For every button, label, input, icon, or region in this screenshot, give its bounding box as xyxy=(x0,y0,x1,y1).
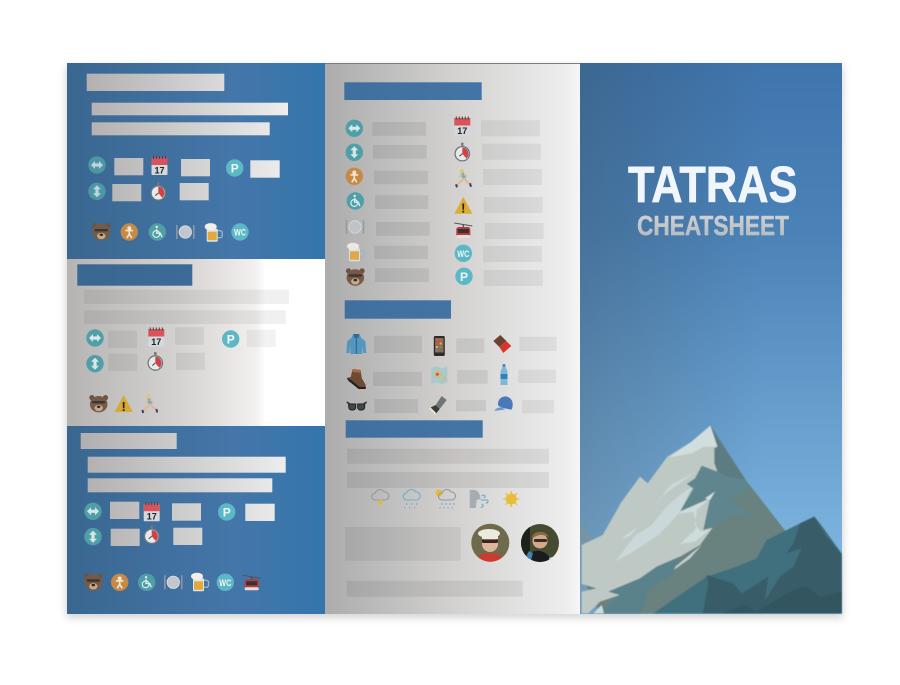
icon: parking: P xyxy=(227,332,235,346)
icon: toilet: WC xyxy=(234,228,246,238)
icon: calendar: 17 xyxy=(457,126,467,136)
label box: distance xyxy=(114,158,143,175)
page shadow xyxy=(66,66,843,618)
label box: date xyxy=(181,159,210,176)
label box: date xyxy=(172,503,201,521)
gear label xyxy=(373,372,422,386)
icon: wheelchair xyxy=(347,192,364,210)
icon: bear xyxy=(89,395,108,412)
heading bar xyxy=(87,74,224,91)
icon: parking: P xyxy=(460,270,468,284)
decorative edge line xyxy=(325,63,580,64)
label box: time xyxy=(173,528,202,545)
icon: cable car xyxy=(243,575,261,590)
legend label xyxy=(482,144,541,160)
icon: calendar: 17 xyxy=(151,337,161,347)
icon: horizontal distance xyxy=(88,156,106,174)
icon: boot xyxy=(347,369,366,389)
label box: parking xyxy=(247,330,276,347)
label box: elevation xyxy=(111,529,140,546)
title: TATRAS xyxy=(628,156,798,213)
icon: beer xyxy=(347,243,364,261)
photo: author one xyxy=(471,524,510,562)
label box: parking xyxy=(250,160,280,178)
icon: stopwatch xyxy=(148,352,162,370)
icon: restaurant xyxy=(346,220,364,234)
legend label xyxy=(484,197,543,213)
photo: author two xyxy=(521,524,559,562)
icon: cap xyxy=(494,396,513,411)
icon: map xyxy=(431,366,447,384)
gear label xyxy=(374,336,422,353)
gear label xyxy=(456,338,484,353)
legend label xyxy=(376,222,430,236)
icon: calendar: 17 xyxy=(154,166,165,176)
legend label xyxy=(483,169,542,185)
icon: rain xyxy=(403,490,420,508)
panel: cover xyxy=(580,63,842,614)
subtitle: CHEATSHEET xyxy=(637,210,789,241)
icon: parking: P xyxy=(231,162,239,176)
icon: baby xyxy=(111,574,128,591)
icon: phone xyxy=(434,336,445,356)
icon: warning: ! xyxy=(122,399,126,414)
icon: runner xyxy=(142,395,157,413)
icon: bear xyxy=(84,573,103,591)
gear label xyxy=(518,370,556,383)
icon: stopwatch xyxy=(455,143,470,161)
icon: elevation xyxy=(88,183,106,200)
label box: elevation xyxy=(112,184,141,201)
cover sky xyxy=(580,63,842,614)
icon: calendar xyxy=(454,116,470,136)
legend label xyxy=(484,270,543,286)
legend label xyxy=(481,120,540,136)
legend label xyxy=(373,145,427,159)
icon: toilet xyxy=(231,223,249,241)
panel: middle left white section xyxy=(67,259,325,426)
legend label xyxy=(375,268,429,282)
text block line 1 xyxy=(84,290,289,304)
label box: parking xyxy=(245,504,275,521)
text block line 2 xyxy=(84,310,286,324)
icon: baby xyxy=(346,168,363,185)
gear label xyxy=(457,370,488,384)
icon: warning: ! xyxy=(461,201,465,216)
gear label xyxy=(456,400,486,411)
icon: baby xyxy=(121,223,138,241)
icon: calendar xyxy=(152,156,168,176)
gear label xyxy=(519,337,557,351)
icon: parking xyxy=(226,159,243,177)
icon: restaurant xyxy=(165,575,182,589)
icon: calendar: 17 xyxy=(147,512,157,522)
icon: wheelchair xyxy=(138,574,155,591)
icon: calendar xyxy=(148,328,164,347)
icon: elevation xyxy=(346,144,363,161)
icon: jacket xyxy=(346,334,366,354)
icon: chocolate xyxy=(493,335,511,353)
illustration: mountain xyxy=(582,426,842,613)
icon: sunglasses xyxy=(347,402,367,410)
heading bar xyxy=(77,264,192,286)
legend label xyxy=(375,195,428,209)
icon: stopwatch xyxy=(151,182,166,200)
icon: wheelchair xyxy=(149,223,166,241)
icon: toilet: WC xyxy=(457,249,469,260)
label box: time xyxy=(180,183,209,200)
icon: cable car xyxy=(454,223,472,238)
icon: toilet xyxy=(217,574,234,591)
icon: parking xyxy=(218,503,235,521)
icon: warning xyxy=(454,197,472,216)
text block line 2 xyxy=(347,472,549,488)
text block line 1 xyxy=(88,457,286,473)
heading bar: weather xyxy=(346,420,483,438)
icon: beer xyxy=(191,573,208,591)
icon: horizontal distance xyxy=(84,503,102,520)
icon: calendar xyxy=(144,502,160,522)
icon: elevation xyxy=(84,528,102,545)
icon: parking xyxy=(222,330,239,348)
icon: warning xyxy=(115,395,133,414)
panel: middle column xyxy=(325,63,580,614)
icon: stopwatch xyxy=(144,525,159,544)
icon: toilet: WC xyxy=(219,578,231,589)
legend label xyxy=(372,122,426,136)
legend label xyxy=(374,171,428,184)
text block line 1 xyxy=(92,103,288,115)
label box: time xyxy=(176,353,205,370)
icon: horizontal distance xyxy=(86,329,104,347)
gear label xyxy=(522,400,554,413)
icon: sun xyxy=(503,491,519,507)
heading bar: gear xyxy=(345,300,451,319)
icon: parking xyxy=(455,268,473,285)
gear label xyxy=(374,399,418,413)
label box: elevation xyxy=(108,354,137,371)
heading bar: legend xyxy=(344,82,482,100)
icon: elevation xyxy=(86,355,104,372)
author bio text block xyxy=(345,527,461,561)
icon: toilet xyxy=(455,245,472,262)
legend label xyxy=(485,223,544,239)
label box: date xyxy=(175,327,204,345)
icon: water bottle xyxy=(500,364,508,385)
text block line 2 xyxy=(92,122,270,135)
label box: distance xyxy=(108,331,137,348)
icon: horizontal distance xyxy=(346,120,363,137)
icon: bear xyxy=(346,268,365,286)
icon: parking: P xyxy=(223,506,231,520)
icon: thunderstorm xyxy=(372,490,389,508)
icon: bear xyxy=(92,223,111,240)
icon: sun and rain xyxy=(436,490,456,508)
icon: wind xyxy=(470,490,488,508)
panel: bottom left blue section xyxy=(67,426,325,614)
text block line 1 xyxy=(347,449,549,464)
text block line 2 xyxy=(88,478,272,492)
icon: restaurant xyxy=(177,225,194,239)
icon: runner xyxy=(456,169,471,187)
heading bar xyxy=(81,433,177,449)
legend label xyxy=(483,246,542,262)
icon: flashlight xyxy=(430,396,447,414)
footer text block xyxy=(347,581,523,597)
legend label xyxy=(374,246,428,259)
icon: beer xyxy=(205,223,222,242)
panel: top left blue section xyxy=(67,63,325,259)
label box: distance xyxy=(110,502,139,519)
